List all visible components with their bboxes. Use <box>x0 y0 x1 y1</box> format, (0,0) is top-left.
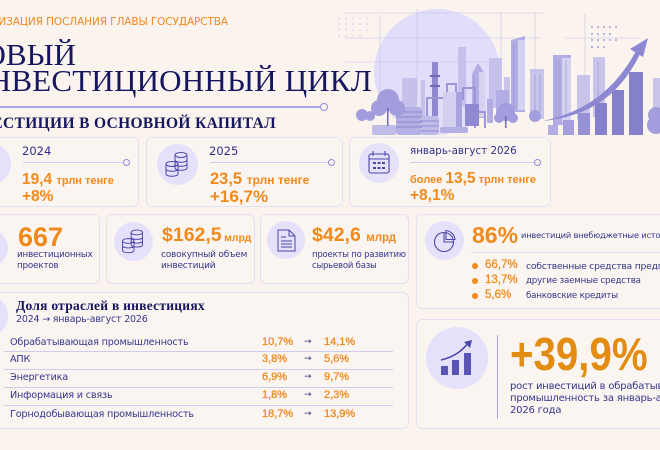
rule <box>410 162 535 163</box>
icon circle <box>0 143 11 185</box>
row: ICT: 2,3% <box>324 389 349 401</box>
panel: sector shares <box>0 292 409 429</box>
value: +39,9% <box>510 328 648 380</box>
card: 2025 <box>146 137 343 207</box>
row: ICT: → <box>304 390 311 400</box>
card: 667 projects <box>0 214 100 284</box>
label <box>312 250 406 270</box>
row: energy: → <box>304 372 311 382</box>
growth: +8% <box>22 188 53 205</box>
icon: pie chart <box>425 221 464 260</box>
icon: coins <box>157 144 198 185</box>
value: 23,5 трлн тенге <box>210 170 309 188</box>
dot grids <box>338 17 368 37</box>
row: agro: АПК <box>10 354 30 365</box>
value: более 13,5 трлн тенге <box>410 170 536 187</box>
label: инвестиционных <box>17 250 93 260</box>
table: sector rows <box>4 336 393 420</box>
row: manufacturing: 10,7% <box>262 336 293 348</box>
row: manufacturing: 14,1% <box>324 336 355 348</box>
value: $42,6 млрд <box>312 224 396 246</box>
item: own funds <box>472 259 660 272</box>
value: 667 <box>18 222 63 252</box>
period: январь-август 2026 <box>410 145 517 157</box>
item: other loans: другие заемные средства <box>526 276 641 286</box>
item: bank loans <box>472 289 618 301</box>
value: 19,4 трлн тенге <box>22 171 114 188</box>
row: ICT <box>10 389 349 401</box>
title <box>0 37 372 98</box>
heading: Доля отраслей в инвестициях <box>16 298 205 313</box>
row: mining: → <box>304 409 311 419</box>
row: agro: 3,8% <box>262 353 287 365</box>
label: проектов <box>17 260 59 270</box>
card: +39,9% growth <box>416 319 660 429</box>
card: $42,6 млрд <box>260 214 409 284</box>
label <box>161 250 247 270</box>
row: energy: 6,9% <box>262 371 287 383</box>
year: 2025 <box>209 144 238 158</box>
growth: +16,7% <box>210 187 268 206</box>
growth arrow <box>543 38 648 121</box>
value: $162,5 млрд <box>162 224 251 246</box>
item: bank loans: 5,6% <box>485 289 511 301</box>
row: mining: Горнодобывающая промышленность <box>10 409 194 420</box>
refinery <box>427 62 485 133</box>
icon circle <box>0 295 8 337</box>
row: mining: 18,7% <box>262 408 293 420</box>
illustration: city skyline with growth arrow <box>338 9 660 135</box>
item: other loans: 13,7% <box>485 274 518 286</box>
growth: +8,1% <box>410 187 454 204</box>
value: 86% <box>472 222 518 248</box>
row: mining: 13,9% <box>324 408 355 420</box>
rule <box>471 252 660 253</box>
label <box>17 250 93 270</box>
row: manufacturing: → <box>304 337 311 347</box>
label: сырьевой базы <box>312 260 377 270</box>
icon: calendar <box>359 143 399 183</box>
icon circle <box>0 229 8 267</box>
label: совокупный объем <box>161 250 247 260</box>
row: ICT: Информация и связь <box>10 390 112 401</box>
divider <box>497 335 498 419</box>
row: agro <box>10 353 349 365</box>
label: 2026 года <box>510 405 561 416</box>
icon: coins <box>114 222 153 261</box>
card: 86% funding <box>416 214 660 309</box>
icon: document <box>267 221 305 259</box>
title rule <box>0 106 320 108</box>
icon: growth chart <box>426 327 488 389</box>
coins <box>372 107 439 135</box>
row: manufacturing <box>10 336 355 348</box>
item: other loans <box>472 274 641 286</box>
label <box>510 381 660 416</box>
card: 2024 <box>0 137 139 207</box>
label: инвестиций <box>161 260 215 270</box>
buildings <box>402 47 660 120</box>
rule <box>210 162 328 163</box>
row: energy: 9,7% <box>324 371 349 383</box>
year: 2024 <box>22 144 51 158</box>
card: $162,5 млрд <box>106 214 255 284</box>
row: ICT: 1,8% <box>262 389 287 401</box>
row: agro: → <box>304 354 311 364</box>
item: own funds: 66,7% <box>485 259 518 271</box>
row: manufacturing: Обрабатывающая промышленность <box>10 337 189 348</box>
row: mining <box>10 408 355 420</box>
trees <box>356 89 660 134</box>
card: январь-август 2026 <box>349 137 551 207</box>
rule <box>23 162 123 163</box>
item: bank loans: банковские кредиты <box>526 291 618 301</box>
row: energy: Энергетика <box>10 372 68 383</box>
row: agro: 5,6% <box>324 353 349 365</box>
row: energy <box>10 371 349 383</box>
subheading: 2024 → январь-август 2026 <box>16 314 148 325</box>
label: проекты по развитию <box>312 250 406 260</box>
background circle <box>374 9 500 135</box>
bar chart <box>548 72 643 135</box>
